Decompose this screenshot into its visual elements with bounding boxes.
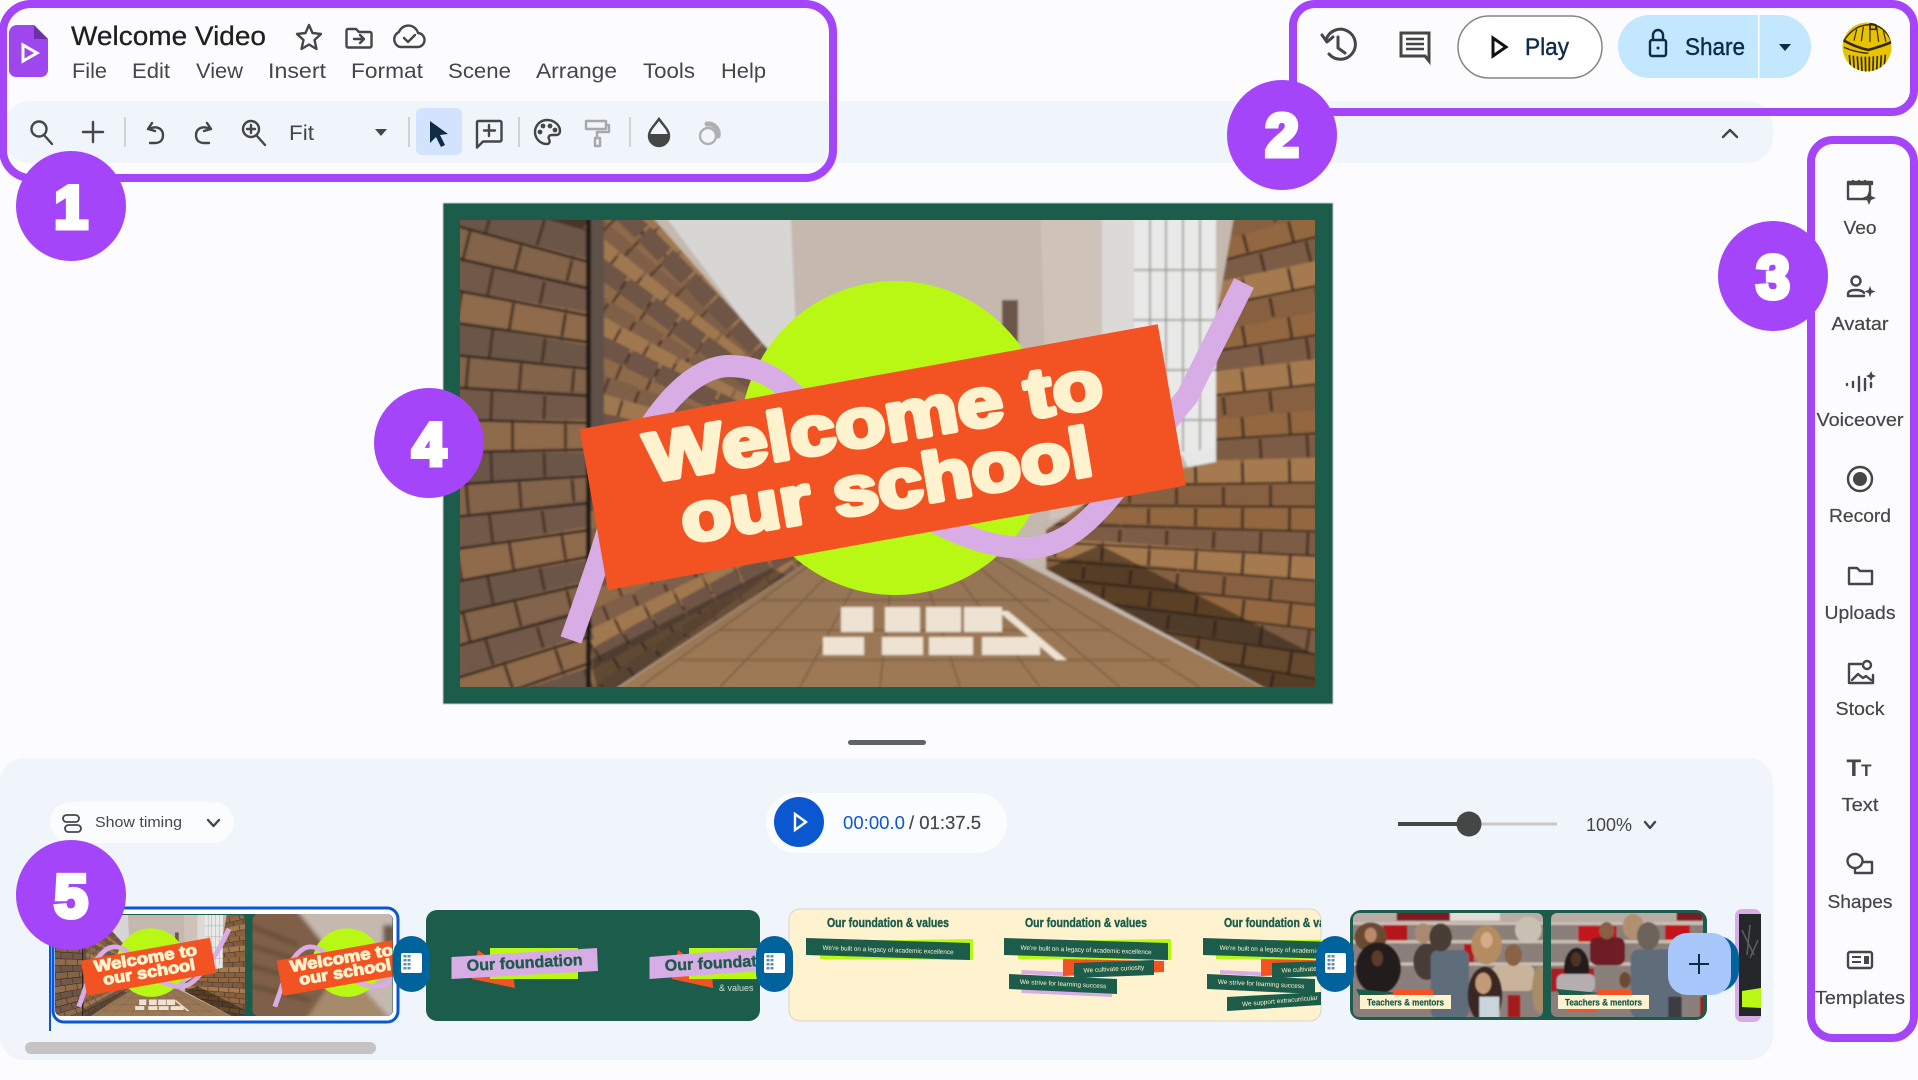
zoom level: Fit (289, 122, 314, 145)
icon: paint roller (586, 121, 609, 146)
zoom slider: 100% (1586, 815, 1632, 835)
tool: Stock (1836, 661, 1886, 719)
clip 3: foundation and values: We strive for learning success (1020, 979, 1107, 990)
icon: star (297, 25, 321, 49)
clip 3: foundation and values: We're built on a legacy of academic excellence (822, 945, 954, 956)
clip 2: our foundation: Our foundation (466, 952, 583, 975)
clip 3: foundation and values: We're built on a legacy of academic excellence (1020, 945, 1152, 956)
show timing control: Show timing (95, 814, 182, 831)
menu bar: Scene (448, 60, 511, 83)
menu bar: Arrange (536, 60, 617, 83)
clip 4: teachers and mentors (1350, 910, 1708, 1023)
tool: Voiceover (1816, 371, 1904, 430)
menu bar: Insert (268, 60, 326, 83)
number badge 1 (16, 151, 126, 261)
tool: Text (1842, 755, 1878, 815)
icon: redo (196, 123, 211, 143)
playback control (766, 793, 1007, 853)
playback control: 00:00.0 (843, 813, 905, 833)
clip 3: foundation and values: We strive for learning success (1218, 979, 1305, 990)
slide headline: our school (675, 413, 1098, 558)
clip 1: welcome (52, 906, 400, 1024)
clip 1: welcome: Welcome to (93, 942, 198, 976)
number badge 2 (1227, 80, 1337, 190)
menu bar: Help (721, 60, 766, 83)
timeline panel background (0, 758, 1773, 1060)
transition marker 2 (756, 936, 793, 992)
zoom slider (1398, 812, 1655, 836)
playhead (49, 909, 51, 1031)
share button (1618, 15, 1811, 78)
icon: zoom (243, 121, 265, 145)
clip 1: welcome: Welcome to (289, 942, 394, 976)
icon: cursor (430, 121, 448, 147)
menu bar: Format (351, 60, 423, 83)
tool: Text: Text (1842, 795, 1878, 815)
tool: Record (1829, 467, 1891, 526)
icon: comments (1401, 33, 1429, 61)
clip 2: our foundation: & values (719, 983, 754, 993)
menu bar (72, 60, 766, 83)
slide frame (443, 203, 1333, 704)
caption: teachers and mentors 1 (1356, 989, 1451, 1009)
tool: Veo (1844, 181, 1876, 238)
icon: cloud saved (394, 26, 425, 47)
clip 3: foundation and values: We cultivate curiosity (1281, 964, 1343, 975)
caption: teachers and mentors 2: Teachers & mentors (1565, 998, 1642, 1008)
tool: Templates (1815, 952, 1905, 1008)
document title: Welcome Video (71, 21, 266, 51)
photo: school corridor (440, 120, 1340, 795)
icon: dropdown arrow (375, 129, 387, 136)
tool: Avatar (1832, 276, 1888, 334)
tool: Uploads (1824, 568, 1896, 623)
number badge 5: 5 (54, 863, 88, 930)
menu bar: File (72, 60, 107, 83)
menu bar: Tools (643, 60, 695, 83)
user avatar (1842, 22, 1892, 72)
caption: teachers and mentors 1: Teachers & mentors (1367, 998, 1444, 1008)
number badge 2: 2 (1265, 102, 1299, 169)
icon: collapse chevron (1723, 130, 1737, 137)
slide artwork shapes (571, 281, 1244, 640)
tool: Record: Record (1829, 506, 1891, 526)
clip 3: foundation and values: We're built on a legacy of academic excellence (1219, 945, 1351, 956)
clip 1: welcome: our school (102, 957, 196, 989)
clip 3: foundation and values: Our foundation & values (1025, 915, 1147, 930)
icon: search (32, 122, 52, 144)
tool: Veo: Veo (1844, 218, 1876, 238)
resize handle (848, 740, 926, 745)
toolbar strip (4, 101, 1773, 163)
share button: Share (1685, 34, 1745, 61)
tool: Stock: Stock (1836, 699, 1886, 719)
number badge 4 (374, 388, 484, 498)
number badge 4: 4 (412, 411, 446, 478)
tool: Avatar: Avatar (1832, 314, 1888, 334)
number badge 3 (1718, 221, 1828, 331)
tool: Voiceover: Voiceover (1816, 410, 1904, 430)
main slide preview (440, 120, 1340, 795)
toolbar icons (32, 108, 718, 155)
number badge 5 (16, 840, 126, 950)
icon: fill drop (649, 119, 669, 146)
tool: Templates: Templates (1815, 988, 1905, 1008)
callout frame 3: side rail (1811, 140, 1914, 1038)
transition marker 3 (1316, 936, 1354, 992)
slide headline: Welcome to (640, 345, 1108, 497)
clip 3: foundation and values: We support extracurricular (1242, 995, 1319, 1008)
photo: classroom frame 2 (1550, 910, 1708, 1020)
toolbar separators (125, 117, 630, 147)
clip 5: partial next clip (1735, 909, 1761, 1022)
icon: add (83, 122, 103, 142)
number badge 1: 1 (54, 174, 88, 241)
icon: add comment (477, 121, 502, 148)
tool: Uploads: Uploads (1824, 603, 1896, 623)
clip 1: welcome: our school (298, 957, 392, 989)
play button: Play (1525, 34, 1569, 61)
menu bar: View (196, 60, 244, 83)
timeline scrollbar (25, 1042, 376, 1054)
playback control: / 01:37.5 (909, 813, 981, 833)
clip 3: foundation and values: Our foundation & values (1224, 915, 1346, 930)
tool: Shapes (1828, 854, 1892, 912)
callout frame 1: menu and toolbar (3, 4, 833, 178)
slide headline (640, 345, 1108, 558)
app logo (9, 25, 48, 77)
select tool button (416, 108, 462, 155)
tool: Shapes: Shapes (1828, 892, 1892, 912)
icon: shadow (700, 124, 718, 144)
clip 3: foundation and values (789, 909, 1369, 1021)
transition marker 1 (393, 936, 430, 992)
play button (1458, 16, 1602, 78)
tool: Text: TT (1846, 755, 1872, 782)
add scene button (1668, 933, 1739, 995)
timeline clips (49, 906, 1761, 1031)
photo: second corridor angle (252, 914, 392, 1016)
clip 3: foundation and values: We cultivate curiosity (1083, 964, 1145, 975)
side rail tools (1815, 181, 1905, 1008)
icon: version history (1322, 29, 1355, 59)
clip 2: our foundation (426, 910, 781, 1021)
photo: classroom frame 1 (1353, 913, 1543, 1017)
caption: teachers and mentors 2 (1557, 989, 1649, 1012)
menu bar: Edit (132, 60, 170, 83)
icon: undo (148, 123, 163, 143)
clip 2: our foundation: Our foundation (664, 952, 781, 975)
show timing control (50, 802, 234, 843)
clip 3: foundation and values: Our foundation & values (827, 915, 949, 930)
callout frame 2: header actions (1293, 4, 1914, 112)
number badge 3: 3 (1756, 244, 1790, 311)
icon: move to folder (346, 29, 372, 48)
icon: palette (535, 120, 560, 144)
header actions (1322, 15, 1892, 78)
